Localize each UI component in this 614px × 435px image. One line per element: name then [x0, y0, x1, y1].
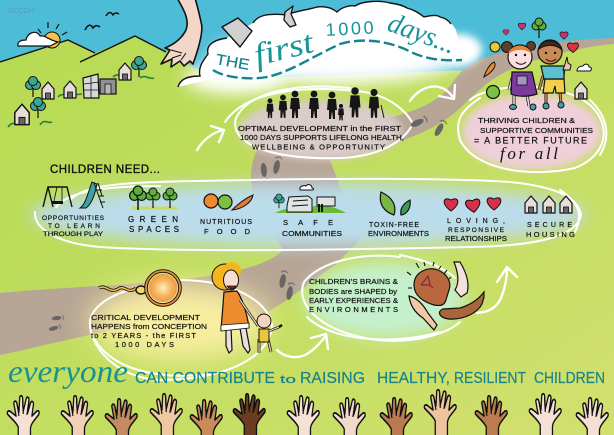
item: safe communities: SAFE [283, 218, 333, 227]
text: for all [500, 144, 558, 163]
text: SUPPORTIVE COMMUNITIES [480, 126, 593, 135]
arrow: to optimal development [197, 126, 224, 150]
mother and baby [212, 262, 282, 353]
bottom tagline: HEALTHY, [377, 370, 450, 387]
winding path [0, 38, 614, 355]
title dashed underline [213, 41, 462, 78]
item: relationships: RESPONSIVE [448, 227, 505, 234]
sun behind cloud [18, 22, 67, 48]
item: housing: SECURE [527, 222, 572, 229]
item: relationships [444, 198, 507, 243]
hill outlines [0, 36, 166, 62]
text [91, 313, 207, 349]
bottom tagline: RESILIENT [454, 370, 526, 387]
bottom tagline: to [280, 374, 296, 386]
item: housing: HOUSING [526, 230, 575, 239]
footprints lower [48, 270, 295, 332]
birds [85, 12, 119, 30]
panel: brains [302, 255, 484, 341]
panel: children need [35, 164, 581, 250]
bottom tagline: everyone [8, 353, 128, 389]
ellipse outline [90, 280, 272, 380]
glow backgrounds [30, 94, 602, 360]
item: nutritious food [200, 194, 253, 236]
title: days... [384, 7, 460, 61]
text: ENVIRONMENTS [309, 305, 398, 314]
item: safe communities [274, 185, 346, 238]
text: WELLBEING & OPPORTUNITY [252, 142, 385, 152]
text: THRIVING CHILDREN & [478, 116, 575, 125]
bottom tagline: CAN CONTRIBUTE [135, 370, 275, 387]
giant hand [161, 0, 202, 67]
title [214, 7, 460, 74]
item: safe communities: COMMUNITIES [282, 231, 342, 238]
silhouettes [266, 87, 384, 120]
children illustration [502, 40, 571, 110]
item: toxin-free [368, 192, 429, 238]
title: THE [214, 51, 251, 74]
text [238, 124, 404, 152]
bottom tagline: CHILDREN [534, 370, 605, 387]
item: housing [525, 196, 575, 239]
arrow: upward to outcome [477, 267, 517, 313]
item: green spaces: SPACES [129, 225, 179, 234]
text: CRITICAL DEVELOPMENT [91, 313, 200, 322]
bottom tagline: RAISING [300, 370, 365, 387]
text: HAPPENS from CONCEPTION [91, 322, 207, 331]
item: toxin-free: TOXIN-FREE [369, 222, 419, 229]
item: green spaces: GREEN [128, 215, 178, 224]
arrow: to brains [277, 334, 328, 357]
village [8, 56, 154, 127]
item: nutritious food: NUTRITIOUS [200, 219, 252, 226]
copyright: ©CCCH [7, 6, 34, 15]
panel: critical development [90, 262, 282, 380]
item: nutritious food: FOOD [204, 227, 251, 236]
text: EARLY EXPERIENCES & [309, 296, 398, 305]
row of raised hands [7, 390, 608, 435]
band outline [35, 179, 581, 250]
head and brain [407, 262, 451, 305]
ellipse outline [458, 87, 606, 172]
text: BODIES are SHAPED by [309, 287, 397, 296]
text [474, 116, 593, 163]
panel: optimal development [225, 87, 412, 158]
item: green spaces [128, 186, 179, 234]
supporting hands [409, 262, 484, 330]
item: relationships: RELATIONSHIPS [445, 236, 507, 243]
item: play: OPPORTUNITIES [42, 215, 105, 222]
title: 1000 [325, 18, 374, 40]
text: 1000 DAYS [115, 340, 174, 349]
title: first [250, 23, 318, 73]
heading: CHILDREN NEED... [50, 164, 160, 176]
cloud [178, 1, 482, 94]
item: play: THROUGH PLAY [43, 231, 104, 238]
item: relationships: LOVING, [447, 218, 505, 225]
footprints upper [409, 115, 448, 138]
ellipse outline [302, 255, 460, 341]
text: OPTIMAL DEVELOPMENT in the FIRST [238, 124, 402, 133]
cleaver icon [222, 6, 296, 47]
item: play [42, 182, 105, 238]
arrow: to thriving children [410, 85, 455, 101]
text [309, 277, 398, 314]
text: = A BETTER FUTURE [474, 136, 587, 146]
text: 1000 DAYS SUPPORTS LIFELONG HEALTH, [240, 133, 404, 142]
sperm and egg [99, 271, 180, 305]
bottom tagline [8, 353, 605, 389]
icons around children [484, 18, 591, 99]
text: to 2 YEARS - the FIRST [91, 331, 196, 340]
item: toxin-free: ENVIRONMENTS [368, 231, 429, 238]
ellipse outline [225, 87, 412, 158]
item: play: TO LEARN [48, 223, 100, 230]
panel: thriving children [458, 18, 606, 172]
footprints middle [259, 156, 283, 181]
text: CHILDREN'S BRAINS & [309, 277, 398, 286]
